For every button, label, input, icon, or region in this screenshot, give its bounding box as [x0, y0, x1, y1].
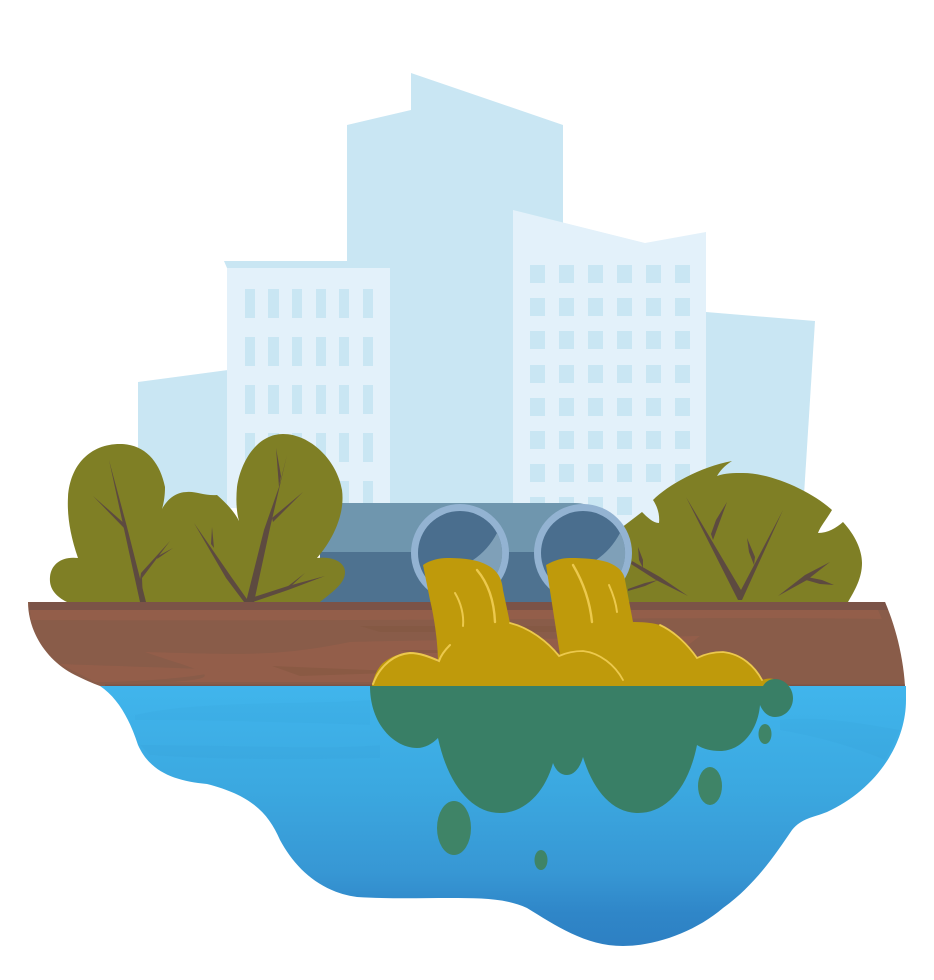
right pipe opening — [534, 504, 632, 602]
river water — [100, 686, 906, 946]
branches: right bush — [628, 497, 834, 600]
right bush — [610, 461, 862, 602]
concrete pipe wall — [320, 503, 610, 604]
left bush — [50, 434, 345, 602]
left apartment building — [224, 261, 390, 508]
sludge highlights — [373, 565, 762, 684]
left pipe opening — [411, 504, 509, 602]
pollution droplets — [437, 724, 772, 870]
submerged green pollution plume — [370, 679, 793, 813]
sewage streams and surface sludge — [372, 558, 790, 686]
background skyline towers — [138, 73, 815, 510]
riverbank soil — [28, 602, 905, 686]
branches: left bush — [93, 448, 325, 602]
right apartment building — [513, 210, 706, 530]
